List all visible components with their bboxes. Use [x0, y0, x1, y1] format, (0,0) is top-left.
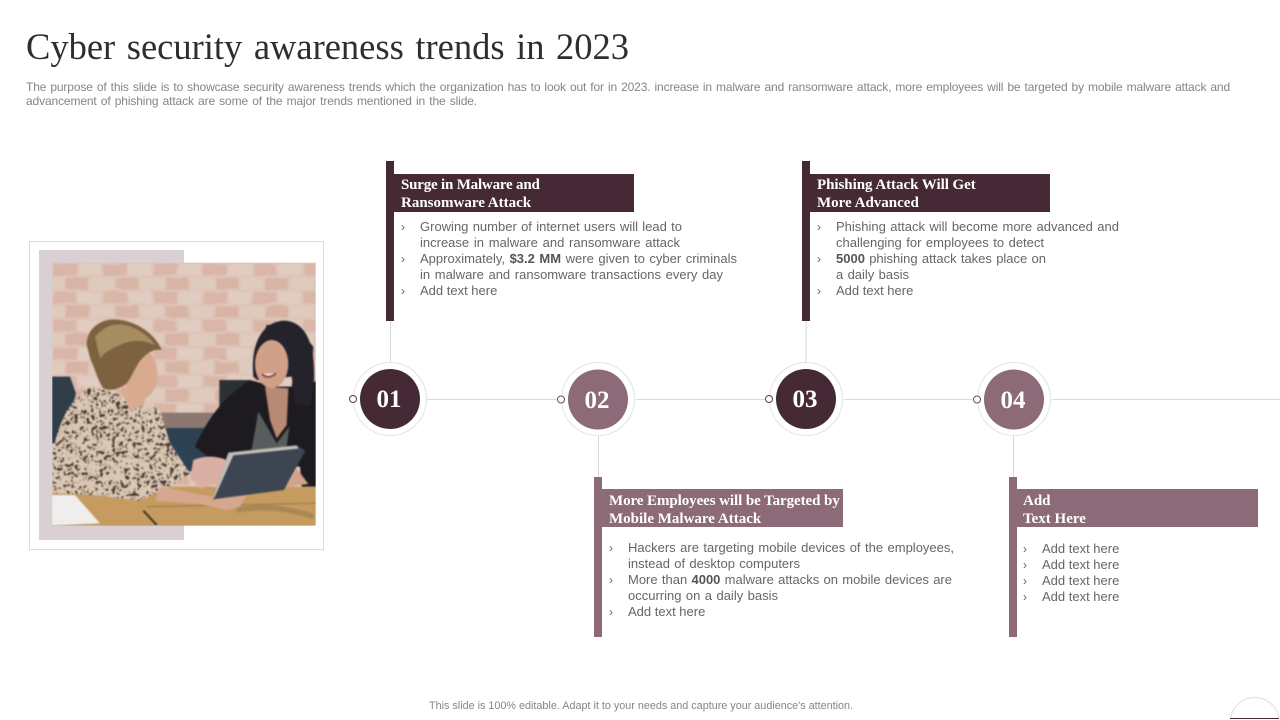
bullet list: more employees: Add text here — [628, 604, 705, 619]
heading: more employees: Mobile Malware Attack — [609, 511, 761, 527]
heading: phishing attack: More Advanced — [817, 195, 919, 211]
bullet list: more employees: › — [609, 605, 613, 619]
timeline node 01 — [349, 362, 427, 436]
bullet list: more employees: instead of desktop computers — [628, 556, 800, 571]
bullet list: add text here: Add text here — [1042, 541, 1119, 556]
bullet list: add text here: › — [1023, 542, 1027, 556]
bullet list: more employees: occurring on a daily basis — [628, 588, 778, 603]
timeline node 03 — [765, 362, 843, 436]
bullet list: add text here — [1023, 541, 1119, 604]
timeline node 04: 04 — [1000, 387, 1026, 414]
bullet list: surge in malware: Add text here — [420, 283, 497, 298]
heading: add text here: Text Here — [1023, 511, 1086, 527]
panel: more employees targeted by mobile malware — [594, 477, 954, 637]
heading: phishing attack: Phishing Attack Will Get — [817, 177, 976, 193]
photo panel: two colleagues with a tablet — [29, 241, 324, 550]
heading: surge in malware: Surge in Malware and — [401, 177, 540, 193]
photo frame — [30, 242, 324, 550]
timeline node 02: 02 — [584, 387, 610, 414]
heading: surge in malware — [394, 174, 634, 212]
heading: more employees: More Employees will be Targeted by — [609, 493, 840, 509]
bullet list: more employees — [609, 540, 954, 619]
bullet list: surge in malware: › — [401, 220, 405, 234]
heading: phishing attack — [810, 174, 1050, 212]
bullet list: phishing attack — [817, 219, 1119, 298]
bullet list: surge in malware: › — [401, 284, 405, 298]
heading: add text here — [1017, 489, 1258, 527]
heading: add text here: Add — [1023, 493, 1051, 509]
heading: surge in malware: Ransomware Attack — [401, 195, 531, 211]
footer note: This slide is 100% editable. Adapt it to your needs and capture your audience's attention. — [429, 700, 853, 712]
bullet list: phishing attack: Phishing attack will become more advanced and — [836, 219, 1119, 234]
bullet list: surge in malware: Approximately, $3.2 MM were given to cyber criminals — [420, 251, 737, 266]
bullet list: add text here: Add text here — [1042, 589, 1119, 604]
bullet list: phishing attack: Add text here — [836, 283, 913, 298]
bullet list: phishing attack: › — [817, 220, 821, 234]
panel: add text here — [1009, 477, 1258, 637]
bullet list: add text here: Add text here — [1042, 557, 1119, 572]
icon: page number semicircle — [1230, 697, 1280, 719]
grey backing block — [39, 250, 184, 540]
intro text: advancement of phishing attack are some of the major trends mentioned in the slide. — [26, 94, 477, 108]
bullet list: surge in malware: increase in malware and ransomware attack — [420, 235, 680, 250]
timeline node 02 — [557, 362, 635, 436]
timeline node 01: 01 — [376, 386, 402, 413]
intro text — [26, 80, 1230, 108]
bullet list: phishing attack: › — [817, 252, 821, 266]
intro text: The purpose of this slide is to showcase security awareness trends which the organization has to look out for in 2023. increase in malware and ransomware attack, more employees will be targeted by mobile malware attack and — [26, 80, 1230, 94]
bullet list: more employees: › — [609, 541, 613, 555]
bullet list: surge in malware — [401, 219, 737, 298]
bullet list: more employees: › — [609, 573, 613, 587]
panel: phishing attack will get more advanced — [802, 161, 1119, 321]
bullet list: phishing attack: › — [817, 284, 821, 298]
bullet list: phishing attack: 5000 phishing attack takes place on — [836, 251, 1046, 266]
bullet list: more employees: More than 4000 malware attacks on mobile devices are — [628, 572, 952, 587]
bullet list: surge in malware: › — [401, 252, 405, 266]
title: Cyber security awareness trends in 2023 — [26, 26, 629, 67]
bullet list: add text here: › — [1023, 558, 1027, 572]
bullet list: phishing attack: challenging for employees to detect — [836, 235, 1044, 250]
bullet list: add text here: › — [1023, 574, 1027, 588]
bullet list: phishing attack: a daily basis — [836, 267, 909, 282]
bullet list: add text here: Add text here — [1042, 573, 1119, 588]
timeline node 04 — [973, 362, 1051, 436]
photograph — [52, 262, 316, 526]
bullet list: more employees: Hackers are targeting mobile devices of the employees, — [628, 540, 954, 555]
bullet list: add text here: › — [1023, 590, 1027, 604]
bullet list: surge in malware: in malware and ransomware transactions every day — [420, 267, 723, 282]
timeline node 03: 03 — [792, 386, 818, 413]
panel: surge in malware and ransomware attack — [386, 161, 737, 321]
heading: more employees — [602, 489, 843, 527]
bullet list: surge in malware: Growing number of internet users will lead to — [420, 219, 682, 234]
